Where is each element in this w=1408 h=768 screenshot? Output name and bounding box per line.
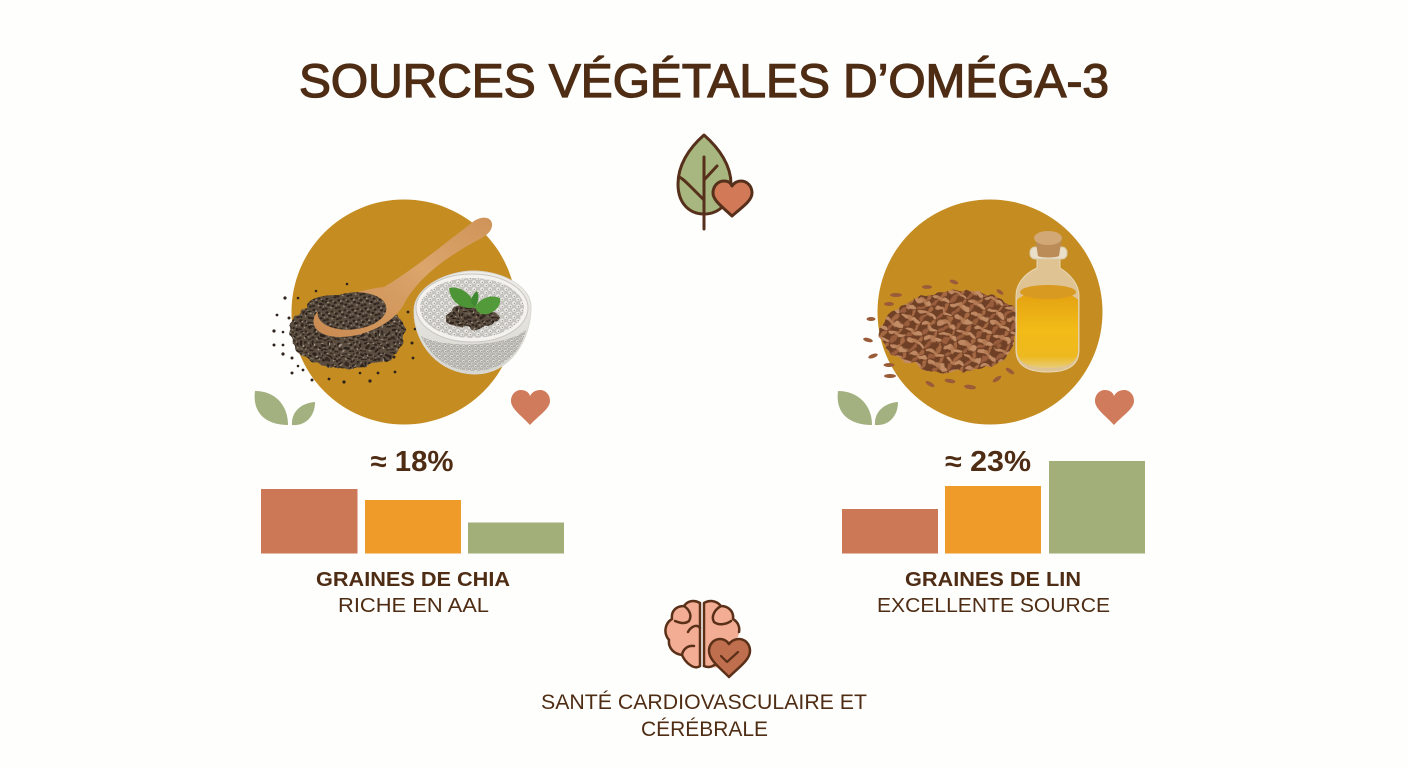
label: graines de lin: EXCELLENTE SOURCE — [877, 595, 1110, 617]
bar chart: lin — [842, 461, 1145, 554]
icon: green leaves — [255, 391, 315, 425]
label: graines de chia — [316, 569, 510, 617]
flaxseed oil bottle — [1016, 231, 1079, 372]
flax circle background — [878, 200, 1102, 424]
caption: santé cardiovasculaire et cérébrale: CÉRÉBRALE — [641, 718, 768, 741]
icon: leaf with heart — [678, 135, 752, 229]
bar chart: chia — [261, 489, 564, 554]
label: graines de chia: RICHE EN AAL — [338, 595, 489, 617]
panel: graines de lin — [838, 200, 1145, 617]
panel: graines de chia — [255, 200, 564, 617]
label: graines de lin — [877, 569, 1110, 617]
label: graines de chia: GRAINES DE CHIA — [316, 569, 510, 591]
chia circle background — [292, 200, 516, 424]
caption: santé cardiovasculaire et cérébrale: SANTÉ CARDIOVASCULAIRE ET — [541, 691, 867, 714]
wooden spoon — [314, 218, 492, 337]
caption: santé cardiovasculaire et cérébrale — [541, 691, 867, 741]
icon: heart — [1095, 390, 1134, 425]
percentage: ≈ 23% — [945, 446, 1031, 478]
percentage: ≈ 18% — [370, 446, 454, 478]
label: graines de lin: GRAINES DE LIN — [905, 569, 1081, 591]
title: SOURCES VÉGÉTALES D’OMÉGA-3 — [299, 55, 1109, 108]
chia pudding bowl — [414, 271, 531, 374]
icon: heart — [511, 390, 550, 425]
chia seed pile — [272, 283, 416, 384]
flax seed pile — [863, 279, 1018, 390]
icon: green leaves — [838, 391, 898, 425]
icon: brain with heart — [665, 601, 750, 677]
